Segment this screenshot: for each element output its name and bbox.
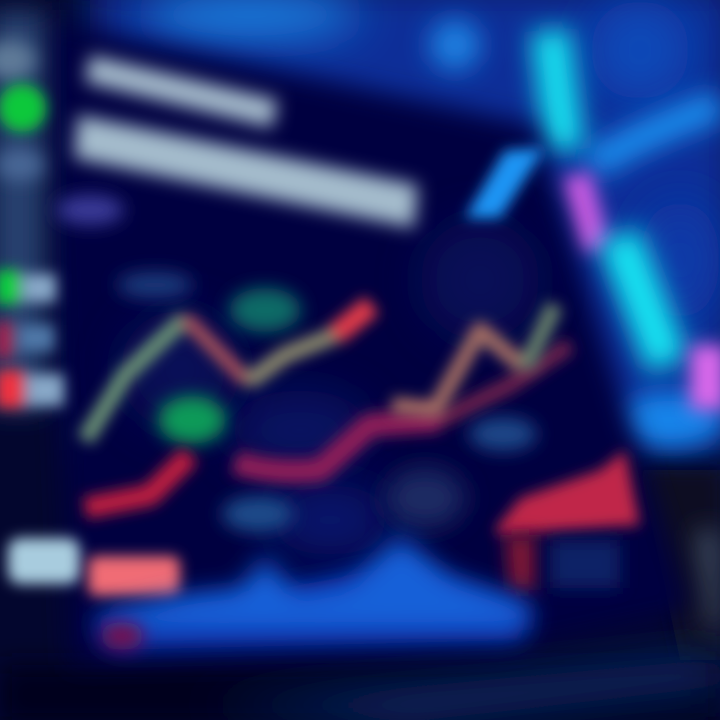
sidebar row: bright red <box>0 370 64 408</box>
icon: small red marker <box>100 622 144 650</box>
label: centre lower <box>222 496 294 532</box>
label: green candle <box>158 396 226 444</box>
panel: left sidebar <box>0 10 64 410</box>
blue area chart peaks <box>100 535 530 632</box>
icon: blue logo shape <box>465 148 545 218</box>
panel: lower screen blue glow <box>90 565 530 650</box>
line chart: lower red series <box>85 345 570 508</box>
label: coral lower left box <box>88 556 180 596</box>
line chart: left series <box>85 305 372 440</box>
label: upper chart <box>117 272 193 298</box>
background: bright cyan and magenta chart line <box>550 30 720 410</box>
bottom edge of the display <box>0 470 720 720</box>
label: pale lower left box <box>8 538 80 584</box>
subheading <box>56 195 124 225</box>
line chart: right series <box>392 305 555 410</box>
label: right chart <box>469 417 537 451</box>
title: second line <box>74 115 418 228</box>
panel: screen inner blue mottling <box>120 220 540 555</box>
title: first line <box>85 55 278 128</box>
sidebar row: red <box>0 322 54 358</box>
icon: green sidebar marker <box>0 84 46 132</box>
sidebar row: green <box>0 270 56 304</box>
red area chart <box>495 450 640 590</box>
label: green chart tag <box>229 288 301 332</box>
bar: centre slate block <box>385 468 465 528</box>
